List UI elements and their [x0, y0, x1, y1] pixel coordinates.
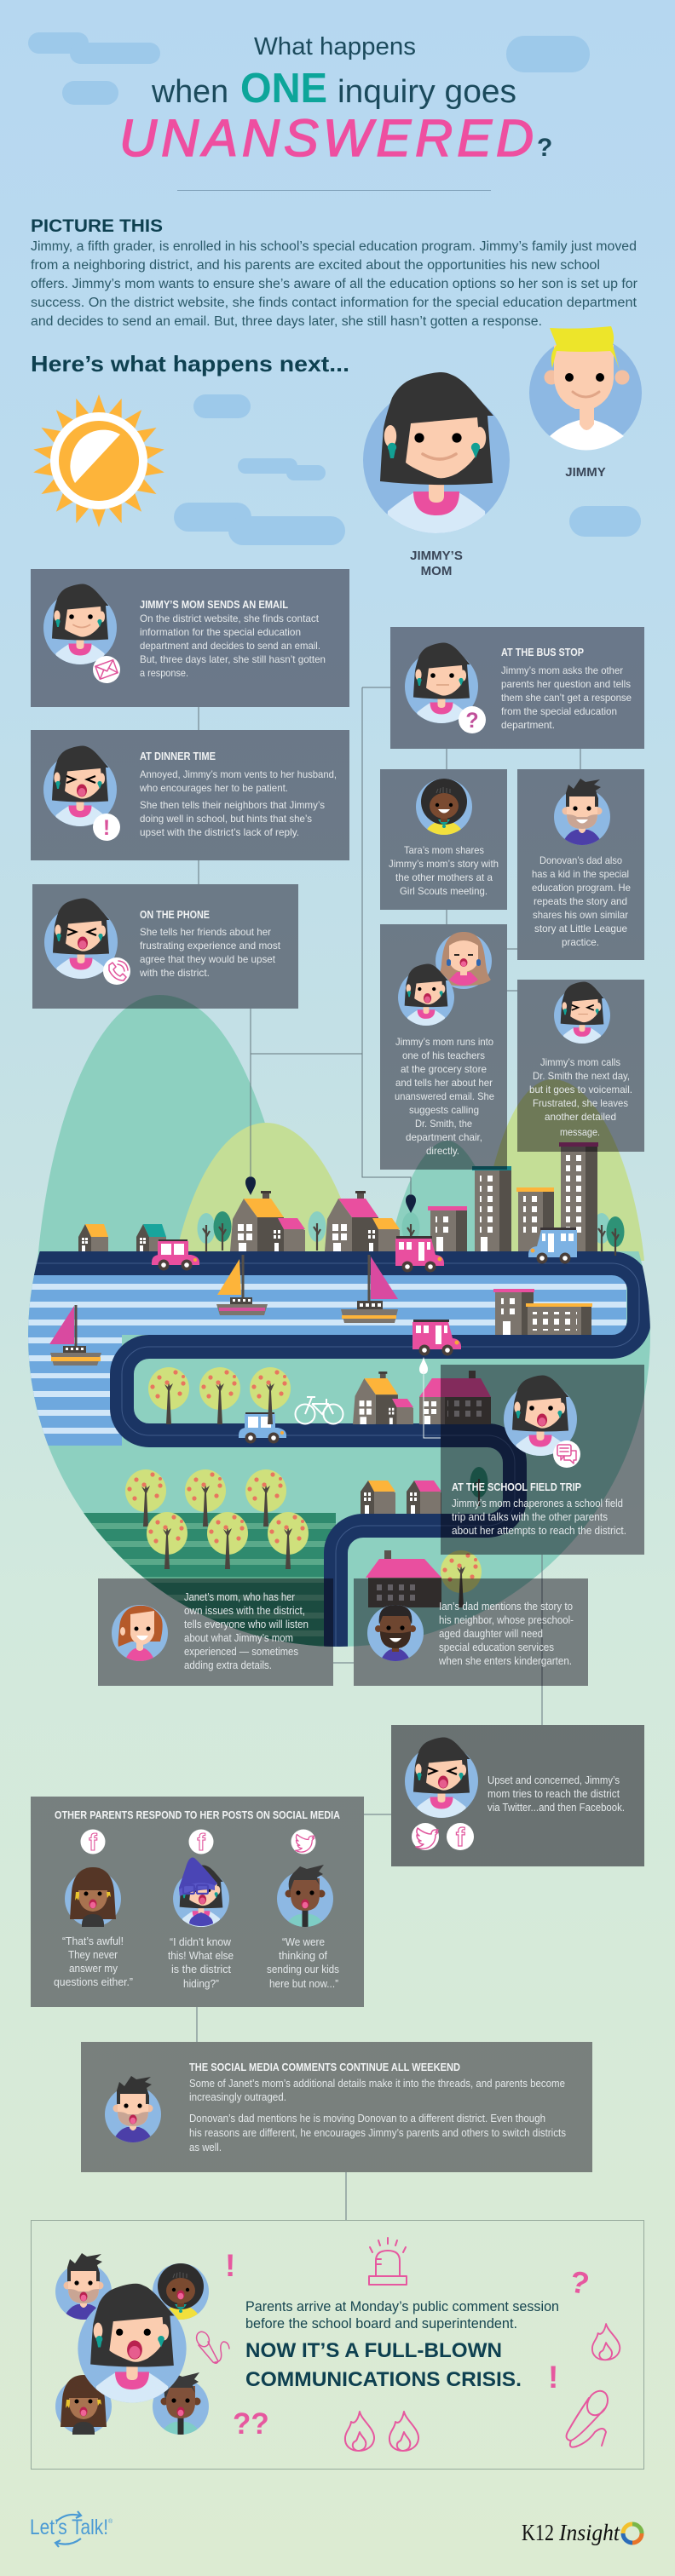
panel: sends an email: On the district website, she finds contact — [140, 612, 320, 624]
parent 1 — [54, 1829, 133, 1988]
panel: sends an email: But, three days later, she still hasn’t gotten — [140, 653, 326, 665]
parent 2: “I didn’t know — [170, 1936, 232, 1948]
pink punctuation marks — [225, 2248, 591, 2441]
panel: sends an email: department and decides to send an email. — [140, 640, 320, 652]
panel: teacher at the grocery store: Dr. Smith, the — [415, 1118, 472, 1130]
icons: flames — [345, 2324, 620, 2451]
panel: Janet's mom: about what Jimmy’s mom — [184, 1632, 293, 1644]
label: Jimmy's mom: MOM — [421, 564, 452, 578]
intro: picture this: offers. Jimmy’s mom wants to ensure she’s aware of all the education options so her son is set up for — [31, 277, 638, 291]
logo: K12 Insight: K12 — [522, 2520, 554, 2545]
panel: at dinner time: who encourages her to be patient. — [139, 782, 288, 794]
panel: at the bus stop: AT THE BUS STOP — [501, 647, 584, 658]
parent 1: questions either.” — [54, 1976, 133, 1988]
panel: Donovan's dad: practice. — [562, 936, 599, 948]
white pin — [419, 1357, 441, 1438]
panel: Tara's mom: Jimmy’s mom’s story with — [389, 858, 499, 870]
label: Jimmy's mom: JIMMY’S — [410, 549, 463, 563]
panel: Ian's dad: when she enters kindergarten. — [438, 1655, 572, 1667]
panel: Twitter and Facebook: Upset and concerned, Jimmy’s — [488, 1774, 620, 1786]
panel: teacher at the grocery store: suggests calling — [409, 1104, 479, 1116]
avatar: Jimmy's mom — [363, 372, 510, 545]
icon: alarm — [369, 2238, 407, 2285]
intro: picture this: PICTURE THIS — [31, 216, 163, 236]
heading: here's what happens next: Here’s what happens next... — [31, 351, 349, 377]
panel: Donovan's dad — [532, 779, 631, 948]
logo: Let's Talk — [30, 2511, 113, 2547]
panel: Donovan's dad: shares his own similar — [533, 909, 628, 921]
hill: left teal — [38, 995, 298, 1261]
icon: large microphone — [567, 2388, 612, 2447]
intro: picture this: from a neighboring district, and his parents are excited about the opportunities his new school — [31, 258, 600, 273]
icon: facebook badge — [447, 1822, 474, 1852]
panel: at the bus stop: Jimmy’s mom asks the other — [501, 664, 623, 676]
panel: comments continue all weekend: as well. — [189, 2142, 222, 2153]
panel: at the bus stop — [405, 642, 632, 733]
map marker: right — [406, 1194, 416, 1213]
panel: Donovan's dad: Donovan’s dad also — [539, 854, 622, 866]
icon: bicycle — [295, 1397, 343, 1424]
panel: voicemail: Dr. Smith the next day, — [533, 1070, 630, 1082]
river-side buildings — [493, 1289, 592, 1335]
icon: small microphone — [194, 2330, 229, 2363]
panel: comments continue all weekend: THE SOCIAL MEDIA COMMENTS CONTINUE ALL WEEKEND — [189, 2061, 460, 2073]
panel: Donovan's dad: repeats the story and — [534, 895, 627, 907]
farm field — [84, 1513, 336, 1647]
panel: Janet's mom: Janet’s mom, who has her — [184, 1591, 295, 1603]
sailboat: pink — [341, 1255, 398, 1323]
icon: exclamation badge: ! — [103, 816, 110, 840]
parent 1: They never — [68, 1949, 118, 1961]
clouds — [28, 32, 641, 545]
panel: on the phone: ON THE PHONE — [140, 909, 210, 921]
panel: school field trip: trip and talks with the other parents — [452, 1511, 608, 1523]
icon: envelope badge — [93, 656, 120, 683]
logo: Let's Talk: ® — [108, 2518, 113, 2525]
panel: at dinner time — [43, 746, 337, 841]
panel: Tara's mom — [389, 779, 499, 897]
parent 3: “We were — [282, 1936, 325, 1948]
parent 2: this! What else — [168, 1950, 234, 1962]
panel: at dinner time: She then tells their neighbors that Jimmy’s — [140, 799, 325, 811]
panel: voicemail: but it goes to voicemail. — [529, 1084, 632, 1095]
top row trees — [198, 1211, 624, 1256]
panel: at dinner time: doing well in school, but hints that she’s — [140, 813, 312, 825]
panel: voicemail — [529, 981, 632, 1138]
label: Jimmy: JIMMY — [565, 465, 606, 480]
title: ? — [537, 134, 552, 162]
text: crisis message: COMMUNICATIONS CRISIS. — [245, 2368, 522, 2391]
panel: Janet's mom: tells everyone who will listen — [184, 1619, 309, 1630]
panel: teacher at the grocery store — [395, 932, 494, 1157]
panel: Ian's dad: his neighbor, whose preschool- — [439, 1614, 574, 1626]
parent 2: f — [197, 1829, 205, 1855]
panel: comments continue all weekend — [105, 2061, 566, 2153]
panel: other parents respond on social media — [54, 1809, 340, 1990]
road — [17, 1263, 639, 1670]
panel: Twitter and Facebook: via Twitter...and then Facebook. — [488, 1802, 625, 1814]
panel: Janet's mom: own issues with the district, — [184, 1605, 305, 1617]
illustrated town scene — [28, 995, 650, 1647]
panel: school field trip: Jimmy’s mom chaperones a school field — [452, 1498, 623, 1509]
icon: question badge — [459, 706, 486, 733]
icon: facebook badge: f — [456, 1822, 465, 1852]
intro: picture this: Jimmy, a fifth grader, is enrolled in his school’s special education program. Jimmy’s family just moved — [31, 239, 637, 254]
panel: Donovan's dad: story at Little League — [534, 923, 627, 934]
panel: at dinner time: AT DINNER TIME — [140, 750, 216, 762]
parent 2: is the district — [171, 1964, 232, 1975]
title — [119, 33, 552, 167]
logo: K12 Insight — [522, 2520, 642, 2545]
panel: comments continue all weekend: increasingly outraged. — [189, 2091, 286, 2103]
panel backgrounds — [31, 569, 644, 2172]
panel: school field trip — [452, 1375, 626, 1537]
logo: Let's Talk: Let’s Talk! — [30, 2516, 108, 2539]
panel: school field trip: AT THE SCHOOL FIELD TRIP — [452, 1481, 581, 1493]
icon: twitter badge — [412, 1823, 439, 1850]
map marker: left — [245, 1176, 256, 1195]
crowd of parents — [55, 2253, 209, 2435]
panel: sends an email: JIMMY’S MOM SENDS AN EMAIL — [140, 599, 288, 611]
panel: teacher at the grocery store: and tells her about her — [395, 1077, 493, 1089]
text: crisis message: before the school board and superintendent. — [245, 2315, 517, 2332]
panel: voicemail: message. — [560, 1126, 600, 1138]
title: UNANSWERED — [119, 109, 534, 167]
title: ONE — [240, 66, 327, 112]
text: crisis message: NOW IT’S A FULL-BLOWN — [245, 2339, 502, 2362]
icon: exclamation badge — [93, 814, 120, 841]
panel: school field trip: about her attempts to reach the district. — [452, 1525, 626, 1537]
panel: sends an email: a response. — [140, 667, 188, 679]
vehicles — [152, 1228, 577, 1443]
pink punctuation marks: ! — [225, 2248, 235, 2283]
sailboat: yellow — [216, 1255, 268, 1315]
parent 2: hiding?” — [183, 1978, 219, 1990]
panel: teacher at the grocery store: unanswered email. She — [395, 1090, 494, 1102]
panel: Donovan's dad: has a kid in the special — [532, 868, 629, 880]
icon: phone badge — [103, 957, 130, 985]
panel: Tara's mom: Tara’s mom shares — [404, 844, 484, 856]
third row houses — [361, 1467, 488, 1607]
panel: at dinner time: Annoyed, Jimmy’s mom vents to her husband, — [140, 768, 337, 780]
second row houses — [353, 1371, 491, 1424]
hill: center green — [175, 1123, 360, 1261]
panel: at the bus stop: from the special education — [501, 705, 617, 717]
panel: voicemail: Jimmy’s mom calls — [540, 1056, 620, 1068]
pink punctuation marks: ! — [548, 2360, 558, 2395]
logo: K12 Insight: Insight — [558, 2520, 620, 2545]
intro: picture this: success. On the district website, she finds contact information for the special education department — [31, 296, 638, 310]
panel: on the phone: agree that they would be upset — [140, 953, 276, 965]
panel: on the phone — [44, 898, 281, 985]
panel: sends an email — [43, 584, 326, 683]
top row houses — [78, 1191, 400, 1251]
top row buildings — [428, 1142, 598, 1251]
panel: communications crisis — [31, 2220, 644, 2469]
panel: on the phone: frustrating experience and most — [140, 940, 281, 952]
icon: chat badge — [553, 1440, 580, 1468]
panel: Tara's mom: the other mothers at a — [395, 871, 493, 883]
panel: sends an email: information for the special education — [140, 626, 301, 638]
label: Jimmy's mom — [410, 549, 463, 578]
panel: voicemail: another detailed — [545, 1111, 616, 1123]
second row fruit trees — [148, 1367, 291, 1424]
panel: comments continue all weekend: Some of Janet’s mom’s additional details make it into the threads, and parents become — [189, 2078, 565, 2090]
panel: Twitter and Facebook — [405, 1738, 625, 1852]
panel: Donovan's dad: education program. He — [532, 882, 631, 894]
panel: at the bus stop: parents her question and tells — [501, 678, 631, 690]
panel: teacher at the grocery store: directly. — [426, 1145, 459, 1157]
icon: question badge: ? — [465, 709, 479, 733]
panel: teacher at the grocery store: department chair, — [406, 1131, 482, 1143]
connector lines — [197, 687, 580, 2220]
parent 1: f — [89, 1829, 97, 1855]
panel: comments continue all weekend: his reasons are different, he encourages Jimmy’s parents and others to switch districts — [189, 2127, 566, 2139]
panel: at the bus stop: department. — [501, 719, 555, 731]
hill: right teal — [388, 1141, 508, 1261]
pink punctuation marks: ? — [568, 2263, 591, 2301]
panel: comments continue all weekend: Donovan’s dad mentions he is moving Donovan to a different district. Even though — [189, 2113, 545, 2125]
parent 3: here but now...” — [269, 1978, 338, 1990]
parent 3: sending our kids — [267, 1964, 339, 1975]
panel: Ian's dad: Ian’s dad mentions the story to — [439, 1601, 573, 1613]
panel: Janet's mom: experienced — sometimes — [184, 1646, 298, 1658]
panel: teacher at the grocery store: one of his teachers — [402, 1049, 485, 1061]
panel: Janet's mom — [112, 1591, 309, 1671]
panel: other parents respond on social media: OTHER PARENTS RESPOND TO HER POSTS ON SOCIAL MEDIA — [55, 1809, 340, 1821]
panel: on the phone: She tells her friends about her — [140, 926, 271, 938]
parent 1: “That’s awful! — [62, 1935, 124, 1947]
lower landscape — [28, 1251, 650, 1647]
third row fruit trees — [125, 1469, 482, 1607]
panel: Ian's dad — [367, 1601, 574, 1667]
parent 3 — [267, 1830, 339, 1990]
panel: Tara's mom: Girl Scouts meeting. — [400, 885, 488, 897]
parent 3: thinking of — [279, 1950, 328, 1962]
avatar: Jimmy — [529, 326, 642, 450]
panel: Janet's mom: adding extra details. — [184, 1659, 272, 1671]
parent 1: answer my — [69, 1963, 118, 1975]
intro: picture this: and decides to send an email. But, three days later, she still hasn’t gotten a response. — [31, 314, 542, 329]
panel: at the bus stop: them she can’t get a response — [501, 692, 632, 704]
text: crisis message: Parents arrive at Monday’s public comment session — [245, 2298, 559, 2314]
panel: teacher at the grocery store: Jimmy’s mom runs into — [395, 1036, 493, 1048]
panel: at dinner time: upset with the district’s lack of reply. — [140, 826, 299, 838]
panel: Ian's dad: special education services — [439, 1642, 554, 1653]
panel: Twitter and Facebook: mom tries to reach the district — [488, 1788, 620, 1800]
panel: teacher at the grocery store: at the grocery store — [401, 1063, 487, 1075]
title: when — [151, 74, 228, 110]
pink punctuation marks: ?? — [233, 2407, 269, 2441]
hill: right green — [477, 1079, 644, 1261]
text: crisis message — [245, 2298, 559, 2391]
panel: Ian's dad: aged daughter will need — [439, 1628, 543, 1640]
title: inquiry goes — [338, 74, 516, 110]
icon: sun — [32, 394, 165, 527]
parent 2 — [168, 1829, 234, 1990]
intro: picture this — [31, 216, 638, 329]
river — [0, 1275, 626, 1446]
sailboat: left — [49, 1305, 101, 1366]
title: What happens — [254, 33, 416, 60]
panel: voicemail: Frustrated, she leaves — [533, 1097, 628, 1109]
panel: on the phone: with the district. — [139, 967, 210, 979]
